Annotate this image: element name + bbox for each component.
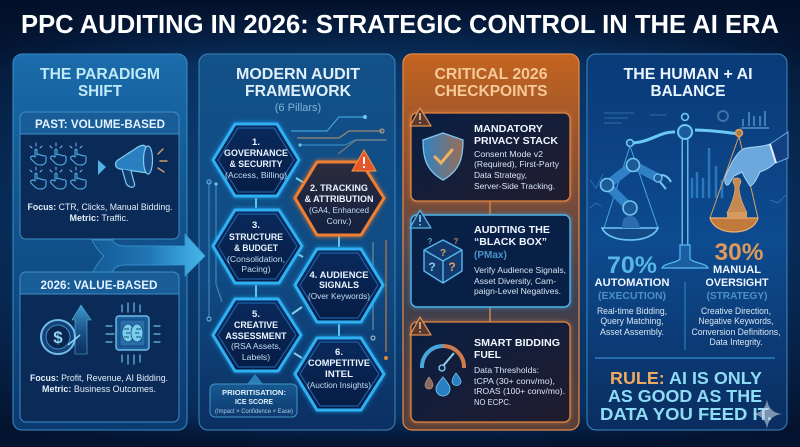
card: mandatory privacy stack — [410, 108, 571, 202]
heading: human and AI balance — [624, 66, 752, 100]
pillar 5: creative assessment: CREATIVE — [234, 320, 278, 331]
background data chart — [590, 111, 786, 208]
text: mandatory privacy stack — [474, 124, 560, 191]
icon: gauge with fuel drops — [422, 346, 464, 396]
pillar 2: tracking and attribution: (GA4, Enhanced — [309, 205, 369, 215]
text: mandatory privacy stack: Server-Side Tracking. — [474, 181, 555, 191]
icon: dollar growth — [41, 305, 91, 354]
text: past focus and metric: Focus: CTR, Clicks, Manual Bidding. — [28, 202, 172, 212]
icon: question mark cube: ? — [448, 260, 456, 274]
panel: critical 2026 checkpoints — [403, 54, 579, 430]
text: auditing the black box: (PMax) — [474, 250, 507, 261]
pillar 3: structure and budget: 3. — [252, 220, 260, 231]
icon: dollar growth: $ — [53, 328, 63, 347]
pillar 5: creative assessment: (RSA Assets, — [231, 341, 281, 351]
text: smart bidding fuel: tROAS (100+ conv/mo). — [474, 386, 565, 396]
icon: shield with check — [423, 133, 463, 180]
heading: critical 2026 checkpoints: CHECKPOINTS — [434, 83, 548, 100]
pillar 5: creative assessment: ASSESSMENT — [226, 331, 287, 342]
illustration: human hand with chess piece — [725, 132, 788, 218]
icon: clicking hands — [30, 143, 86, 189]
callout: prioritisation ice score: ICE SCORE — [235, 399, 273, 406]
pillar 3: structure and budget: & BUDGET — [234, 243, 278, 254]
text: smart bidding fuel: NO ECPC. — [474, 397, 511, 407]
icon: question mark cube: ? — [428, 260, 436, 274]
callout: rule — [600, 368, 772, 424]
heading: human and AI balance: BALANCE — [650, 83, 726, 100]
text: 2026 focus and metric — [30, 373, 168, 394]
label: 2026 value-based: 2026: VALUE-BASED — [40, 280, 158, 292]
icon: megaphone — [116, 145, 167, 187]
icon: warning triangle — [410, 210, 431, 228]
icon: sparkle watermark — [752, 399, 782, 429]
pillar 1: governance and security — [211, 122, 301, 198]
pillar 4: audience signals: 4. AUDIENCE — [310, 270, 368, 281]
icon: AI chip brain — [106, 303, 160, 364]
text: auditing the black box: Verify Audience Signals, — [474, 265, 566, 275]
text: mandatory privacy stack: Consent Mode v2 — [474, 149, 543, 159]
heading: the paradigm shift — [40, 66, 160, 100]
pillar 6: competitive intel: COMPETITIVE — [308, 358, 370, 369]
callout: prioritisation ice score: PRIORITISATION: — [222, 390, 286, 397]
stat: 30 percent manual oversight — [692, 239, 780, 347]
panel: human and AI balance — [587, 54, 788, 430]
stat: 30 percent manual oversight: OVERSIGHT — [706, 277, 769, 289]
connectors between pillars — [256, 178, 339, 358]
pillar 6: competitive intel — [293, 336, 386, 412]
pillar 6: competitive intel: INTEL — [325, 369, 353, 380]
pillar 1: governance and security: & SECURITY — [230, 159, 283, 170]
text: mandatory privacy stack: PRIVACY STACK — [474, 136, 558, 147]
text: auditing the black box: “BLACK BOX” — [474, 237, 547, 248]
title: PPC AUDITING IN 2026: STRATEGIC CONTROL IN THE AI ERA — [21, 11, 779, 39]
pillar 5: creative assessment — [211, 297, 303, 373]
heading: modern audit framework: MODERN AUDIT — [236, 66, 361, 83]
card: auditing the black box — [410, 210, 571, 308]
stat: 70 percent automation: 70% — [607, 252, 657, 279]
heading: the paradigm shift: THE PARADIGM — [40, 66, 160, 83]
heading: modern audit framework: FRAMEWORK — [245, 83, 352, 100]
text: smart bidding fuel: tCPA (30+ conv/mo), — [474, 376, 555, 386]
text: smart bidding fuel: Data Thresholds: — [474, 365, 539, 375]
pillar 6: competitive intel: (Auction Insights) — [307, 380, 371, 390]
text: past focus and metric — [28, 202, 172, 223]
pillar 1: governance and security: GOVERNANCE — [224, 148, 288, 159]
panel: modern audit framework — [199, 54, 395, 430]
stat: 30 percent manual oversight: Data Integrity. — [710, 337, 762, 347]
label: past volume-based: PAST: VOLUME-BASED — [35, 119, 165, 131]
illustration: balance scale — [602, 114, 758, 268]
text: smart bidding fuel — [474, 338, 565, 407]
icon: question mark cube: ? — [454, 237, 459, 246]
stat: 70 percent automation: Query Matching, — [600, 316, 664, 326]
icon: question mark cube: ? — [440, 248, 446, 259]
stat: 70 percent automation: (EXECUTION) — [598, 290, 666, 302]
text: mandatory privacy stack: (Required), First-Party — [474, 159, 560, 169]
heading: modern audit framework — [236, 66, 361, 100]
icon: warning triangle — [410, 108, 431, 126]
text: smart bidding fuel: SMART BIDDING — [474, 338, 560, 349]
stat: 30 percent manual oversight: Conversion Definitions, — [692, 327, 780, 337]
circuit traces — [207, 115, 388, 360]
pillar 6: competitive intel: 6. — [335, 347, 343, 358]
pillar 3: structure and budget: (Consolidation, — [227, 254, 285, 264]
callout: rule: RULE: AI IS ONLY — [610, 368, 762, 388]
pillar 2: tracking and attribution: Conv.) — [327, 216, 351, 226]
pillar 2: tracking and attribution — [293, 150, 386, 237]
horizontal rule — [595, 357, 775, 359]
text: smart bidding fuel: FUEL — [474, 350, 502, 361]
panel: the paradigm shift — [13, 54, 187, 430]
divider — [684, 282, 686, 350]
callout: rule: DATA YOU FEED IT. — [600, 404, 772, 424]
heading: critical 2026 checkpoints — [434, 66, 548, 100]
card: 2026 value-based — [20, 272, 179, 422]
text: 2026 focus and metric: Focus: Profit, Revenue, AI Bidding. — [30, 373, 168, 383]
text: past focus and metric: Metric: Traffic. — [70, 213, 128, 223]
pillar 2: tracking and attribution: & ATTRIBUTION — [304, 194, 374, 205]
icon: question mark cube: ? — [428, 237, 433, 246]
text: 2026 focus and metric: Metric: Business Outcomes. — [42, 384, 156, 394]
pillar 3: structure and budget: Pacing) — [241, 264, 271, 274]
stat: 70 percent automation: Asset Assembly. — [600, 327, 664, 337]
heading: human and AI balance: THE HUMAN + AI — [624, 66, 752, 83]
heading: the paradigm shift: SHIFT — [78, 83, 123, 100]
pillar 4: audience signals — [293, 247, 385, 324]
pillar 1: governance and security: 1. — [252, 137, 260, 148]
text: mandatory privacy stack: Data Strategy, — [474, 170, 527, 180]
icon: small arrow — [98, 160, 106, 175]
pillar 4: audience signals: SIGNALS — [319, 280, 359, 291]
stat: 30 percent manual oversight: (STRATEGY) — [706, 290, 768, 302]
card: past volume-based — [20, 112, 179, 239]
stat: 30 percent manual oversight: Negative Keywords, — [698, 316, 774, 326]
text: mandatory privacy stack: MANDATORY — [474, 124, 543, 135]
text: auditing the black box: paign-Level Negatives. — [474, 286, 561, 296]
stat: 70 percent automation: Real-time Bidding, — [597, 306, 667, 316]
stat: 30 percent manual oversight: MANUAL — [713, 264, 761, 276]
callout: rule: AS GOOD AS THE — [608, 386, 762, 406]
pillar 5: creative assessment: Labels) — [242, 352, 270, 362]
icon: question mark cube — [424, 237, 462, 283]
stat: 70 percent automation: AUTOMATION — [594, 277, 670, 289]
pillar 5: creative assessment: 5. — [252, 309, 260, 320]
callout: prioritisation ice score: (Impact × Confidence × Ease) — [215, 409, 293, 415]
pillar 1: governance and security: (Access, Billing) — [225, 170, 287, 180]
illustration: robot arm — [600, 158, 671, 228]
pillar 3: structure and budget: STRUCTURE — [229, 232, 283, 243]
stat: 30 percent manual oversight: Creative Direction, — [701, 306, 771, 316]
icon: warning triangle — [410, 317, 431, 335]
callout: prioritisation ice score — [210, 374, 297, 417]
pillar 3: structure and budget — [211, 208, 304, 285]
subheading: 6 pillars: (6 Pillars) — [275, 102, 321, 114]
text: auditing the black box — [474, 225, 566, 296]
card: smart bidding fuel — [410, 317, 571, 423]
heading: critical 2026 checkpoints: CRITICAL 2026 — [434, 66, 548, 83]
pillar 4: audience signals: (Over Keywords) — [308, 291, 370, 301]
stat: 70 percent automation — [594, 252, 670, 337]
arrow: past to 2026 — [92, 234, 205, 276]
pillar 2: tracking and attribution: 2. TRACKING — [310, 183, 368, 194]
icon: warning on tracking — [352, 150, 376, 171]
connectors between cards — [489, 201, 491, 322]
text: auditing the black box: AUDITING THE — [474, 225, 550, 236]
stat: 30 percent manual oversight: 30% — [714, 239, 764, 266]
text: auditing the black box: Asset Diversity, Cam- — [474, 276, 556, 286]
